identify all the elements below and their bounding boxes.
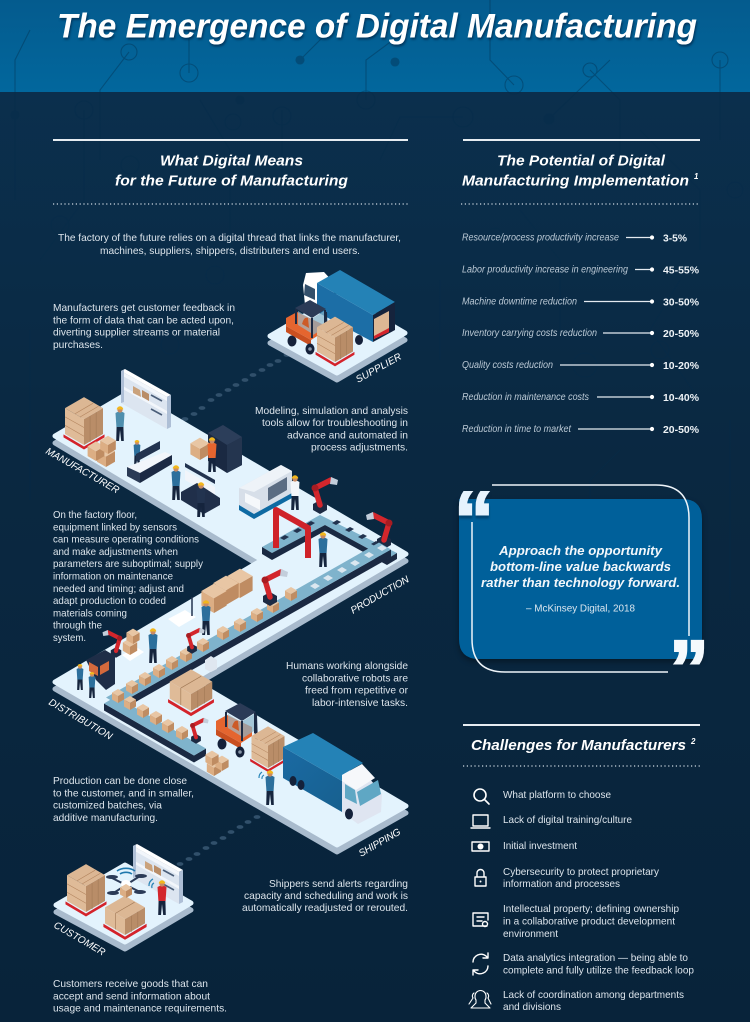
platform: factory floor (55, 392, 406, 852)
item: investment: Initial investment (503, 840, 577, 852)
panel: potential (461, 139, 700, 436)
platform: customer (56, 865, 191, 949)
item: data analytics: complete and fully utilize the feedback loop (503, 964, 694, 976)
small robot (186, 628, 205, 654)
heading: challenges: Challenges for Manufacturers (471, 737, 686, 754)
large boxes (201, 569, 253, 613)
text: modeling: advance and automated in (287, 429, 408, 441)
text: factory floor: information on maintenance (53, 570, 173, 582)
forklift (216, 703, 258, 758)
quote text: bottom-line value backwards (490, 559, 671, 574)
control station (77, 650, 115, 698)
heading: what digital means (115, 152, 348, 190)
item: data analytics: Data analytics integration — being able to (503, 952, 688, 964)
text: modeling: Modeling, simulation and analysis (255, 405, 408, 417)
row: inventory: Inventory carrying costs reduction (462, 328, 597, 339)
worker (266, 770, 274, 805)
label: distribution: DISTRIBUTION (46, 697, 115, 743)
text: production: Production can be done close (53, 775, 187, 787)
text: customer feedback: purchases. (53, 339, 103, 351)
robot (262, 569, 288, 606)
heading: potential: 1 (694, 172, 699, 181)
robot left (102, 630, 122, 658)
text: factory floor: needed and timing; adjust and (53, 583, 184, 595)
text: humans (286, 660, 408, 709)
worker (148, 628, 158, 663)
item: intellectual property (473, 903, 679, 940)
attribution: – McKinsey Digital, 2018 (526, 604, 635, 614)
drone (106, 868, 147, 898)
label: customer: CUSTOMER (52, 920, 107, 959)
metric rows (462, 232, 700, 436)
item: data analytics (473, 952, 694, 976)
heading: what digital means: for the Future of Manufacturing (115, 172, 348, 190)
worker (202, 600, 210, 635)
production scene (77, 477, 397, 762)
row: inventory: 20-50% (663, 328, 700, 340)
wifi (259, 772, 264, 779)
pallet: supplier (316, 317, 354, 366)
text: customers (53, 978, 227, 1015)
text: modeling (255, 405, 408, 454)
title: The Emergence of Digital Manufacturing (57, 8, 697, 46)
item: training (471, 814, 632, 828)
text: factory floor: materials coming (53, 607, 127, 619)
text: factory floor: and make adjustments when (53, 546, 178, 558)
item: intellectual property: environment (503, 928, 558, 940)
item: cybersecurity (475, 866, 660, 890)
wifi (149, 879, 154, 888)
text: customers: usage and maintenance requirements. (53, 1003, 227, 1015)
cnc machine (239, 465, 292, 519)
cart with boxes (122, 629, 144, 661)
text: customers: accept and send information about (53, 990, 210, 1002)
dotted link: supplier to manufacturer (182, 353, 290, 421)
intro text: machines, suppliers, shippers, distributers and end users. (100, 245, 360, 257)
item: platform (474, 789, 611, 804)
text: humans: collaborative robots are (302, 672, 408, 684)
row: resource: 3-5% (663, 232, 688, 244)
screen table (181, 463, 220, 514)
item: platform: What platform to choose (503, 789, 611, 801)
row: maintenance: 10-40% (663, 392, 700, 404)
text: factory floor: parameters are suboptimal; supply (53, 558, 204, 570)
item: investment (472, 840, 577, 852)
second conveyor (104, 696, 206, 762)
item: cybersecurity: information and processes (503, 878, 620, 890)
text: humans: labor-intensive tasks. (312, 697, 408, 709)
text: factory floor: can measure operating conditions (53, 534, 199, 546)
header band (0, 0, 750, 92)
row: time to market (462, 424, 700, 436)
quote text (481, 543, 680, 590)
worker (116, 406, 124, 441)
desk (127, 440, 172, 483)
row: time to market: 20-50% (663, 424, 700, 436)
text: factory floor: equipment linked by sensors (53, 521, 177, 533)
row: machine: 30-50% (663, 296, 700, 308)
label: shipping: SHIPPING (357, 827, 403, 860)
manufacturer scene (63, 369, 300, 519)
text: factory floor: On the factory floor, (53, 509, 137, 521)
label: supplier: SUPPLIER (354, 351, 404, 386)
row: machine (462, 296, 700, 308)
robot (190, 718, 209, 744)
label: production: PRODUCTION (349, 574, 412, 617)
row: quality: Quality costs reduction (462, 360, 553, 371)
row: resource: Resource/process productivity increase (462, 232, 619, 244)
text: humans: freed from repetitive or (305, 684, 408, 696)
text: shippers: automatically readjusted or rerouted. (242, 902, 408, 914)
text: factory floor (53, 509, 204, 644)
text: production: to the customer, and in smaller, (53, 787, 194, 799)
text: customer feedback: diverting supplier streams or material (53, 327, 220, 339)
carton pile (88, 436, 116, 467)
row: machine: Machine downtime reduction (462, 296, 577, 308)
pallet (65, 864, 107, 917)
intro text: The factory of the future relies on a digital thread that links the manufacturer, (58, 232, 401, 244)
heading: potential: Manufacturing Implementation (462, 172, 689, 190)
row: inventory (462, 328, 700, 340)
heading: challenges: 2 (690, 737, 696, 746)
workers at table (172, 465, 206, 517)
text: production: customized batches, via (53, 800, 162, 812)
text: customer feedback: Manufacturers get customer feedback in (53, 302, 235, 314)
text: factory floor: through the (53, 620, 102, 632)
customer scene (65, 844, 183, 940)
text: production (53, 775, 194, 824)
row: quality (462, 360, 700, 372)
circuit pattern (11, 0, 743, 600)
carton pile (205, 751, 229, 776)
row: maintenance (462, 392, 700, 404)
pallet (168, 669, 214, 716)
tiles on belt (310, 545, 387, 589)
quote text: rather than technology forward. (481, 575, 680, 590)
item: cybersecurity: Cybersecurity to protect proprietary (503, 866, 660, 878)
white block (205, 656, 217, 672)
robot top left (312, 477, 338, 514)
upper conveyor (262, 515, 397, 565)
worker white coat (290, 475, 300, 510)
forklift: supplier (286, 300, 328, 354)
text: shippers (242, 878, 408, 914)
callout: quote (454, 475, 709, 713)
heading: potential (462, 152, 699, 190)
quote text: Approach the opportunity (498, 543, 663, 558)
pallet (63, 397, 105, 450)
text: factory floor: system. (53, 632, 86, 644)
row: time to market: Reduction in time to market (462, 424, 572, 435)
worker orange (208, 437, 216, 472)
truck (283, 733, 382, 824)
server racks (208, 425, 242, 473)
shelf (133, 844, 183, 904)
main conveyor (106, 542, 391, 712)
item: coordination (469, 989, 684, 1013)
cart (168, 597, 196, 627)
cartons on belt (112, 587, 297, 740)
pallet (250, 726, 286, 772)
item: coordination: and divisions (503, 1001, 561, 1013)
text: shippers: Shippers send alerts regarding (269, 878, 408, 890)
label: manufacturer: MANUFACTURER (44, 446, 121, 496)
panel: what digital means (53, 139, 408, 257)
red gate (276, 510, 308, 558)
robot right (366, 512, 392, 549)
text: modeling: process adjustments. (311, 442, 408, 454)
row: maintenance: Reduction in maintenance costs (462, 392, 589, 403)
text: customer feedback (53, 302, 235, 351)
heading: potential: The Potential of Digital (497, 152, 666, 170)
item: coordination: Lack of coordination among departments (503, 989, 684, 1001)
icon: opening quote: “ (454, 475, 494, 564)
pallet (103, 896, 147, 940)
row: labor: Labor productivity increase in engineering (462, 264, 628, 276)
text: shippers: capacity and scheduling and work is (244, 890, 408, 902)
panel: challenges (463, 724, 701, 1013)
row: quality: 10-20% (663, 360, 700, 372)
shelf (121, 369, 171, 429)
text: customer feedback: the form of data that can be acted upon, (53, 314, 234, 326)
intro text (58, 232, 401, 257)
text: customers: Customers receive goods that can (53, 978, 208, 990)
heading: what digital means: What Digital Means (160, 152, 303, 170)
platform: supplier (270, 295, 405, 380)
row: labor: 45-55% (663, 264, 700, 276)
item: training: Lack of digital training/culture (503, 814, 632, 826)
worker red (158, 880, 166, 915)
text: production: additive manufacturing. (53, 812, 158, 824)
item: intellectual property: Intellectual property; defining ownership (503, 903, 679, 915)
item: intellectual property: in a collaborative product development (503, 915, 675, 927)
text: factory floor: adapt production to coded (53, 595, 166, 607)
shipping scene (168, 669, 382, 824)
text: humans: Humans working alongside (286, 660, 408, 672)
truck: supplier (303, 270, 395, 345)
worker (318, 532, 328, 567)
icon: closing quote: ” (669, 624, 709, 713)
text: modeling: tools allow for troubleshooting in (262, 417, 408, 429)
cartons by racks (190, 438, 210, 460)
dotted link: shipping to customer (177, 815, 260, 866)
